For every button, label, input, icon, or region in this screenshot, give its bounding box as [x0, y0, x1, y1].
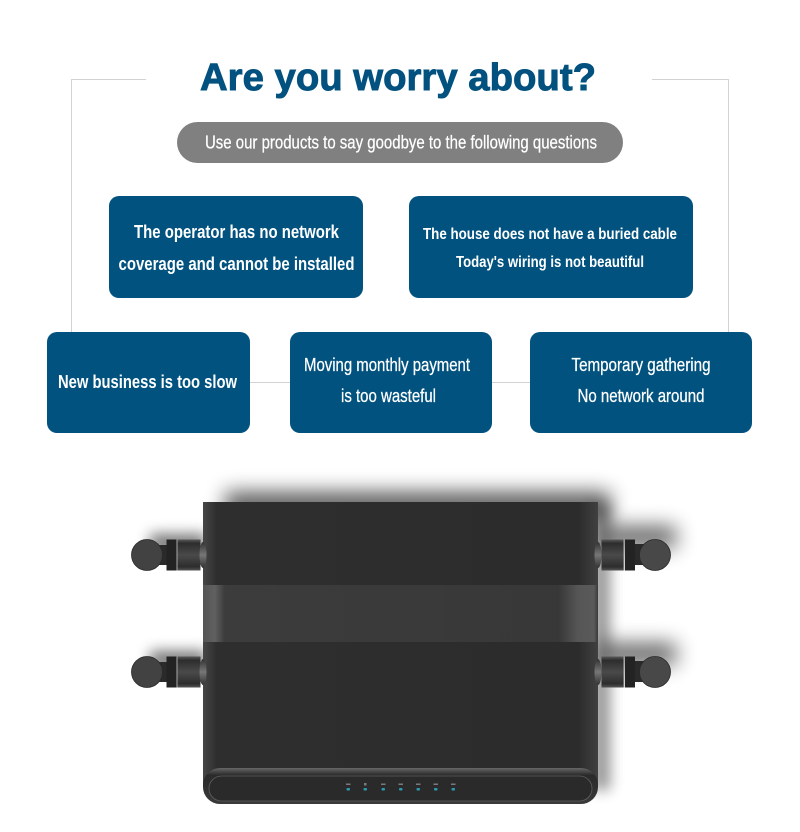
antenna: lower right	[594, 656, 670, 688]
box: new business too slow: New business is too slow	[58, 372, 238, 392]
box: moving monthly payment: Moving monthly payment	[304, 355, 470, 375]
status LEDs	[346, 788, 455, 790]
router shadows	[150, 492, 676, 790]
antenna: lower left	[132, 656, 206, 688]
antenna: upper right	[594, 540, 670, 570]
title: Are you worry about?	[200, 57, 596, 99]
box: new business too slow	[47, 332, 250, 433]
box: operator no coverage: The operator has no network	[134, 222, 340, 242]
box: operator no coverage	[109, 196, 363, 298]
frame lines connecting the boxes	[72, 80, 728, 382]
subtitle pill: Use our products to say goodbye to the following questions	[205, 132, 597, 152]
box: moving monthly payment	[290, 332, 492, 433]
router product image	[132, 492, 676, 804]
box: temporary gathering	[530, 332, 752, 433]
box: temporary gathering: No network around	[578, 386, 704, 406]
router body	[203, 502, 598, 787]
antenna: upper left	[132, 540, 206, 570]
box: no buried cable: The house does not have a buried cable	[423, 226, 677, 243]
box: temporary gathering: Temporary gathering	[572, 355, 710, 375]
router front panel	[203, 768, 598, 804]
box: moving monthly payment: is too wasteful	[341, 386, 436, 406]
subtitle pill	[177, 122, 623, 163]
router centre band	[203, 585, 598, 642]
box: no buried cable: Today's wiring is not beautiful	[456, 254, 644, 271]
box: no buried cable	[409, 196, 693, 298]
LED icons	[346, 783, 456, 786]
box: operator no coverage: coverage and cannot be installed	[118, 254, 354, 274]
